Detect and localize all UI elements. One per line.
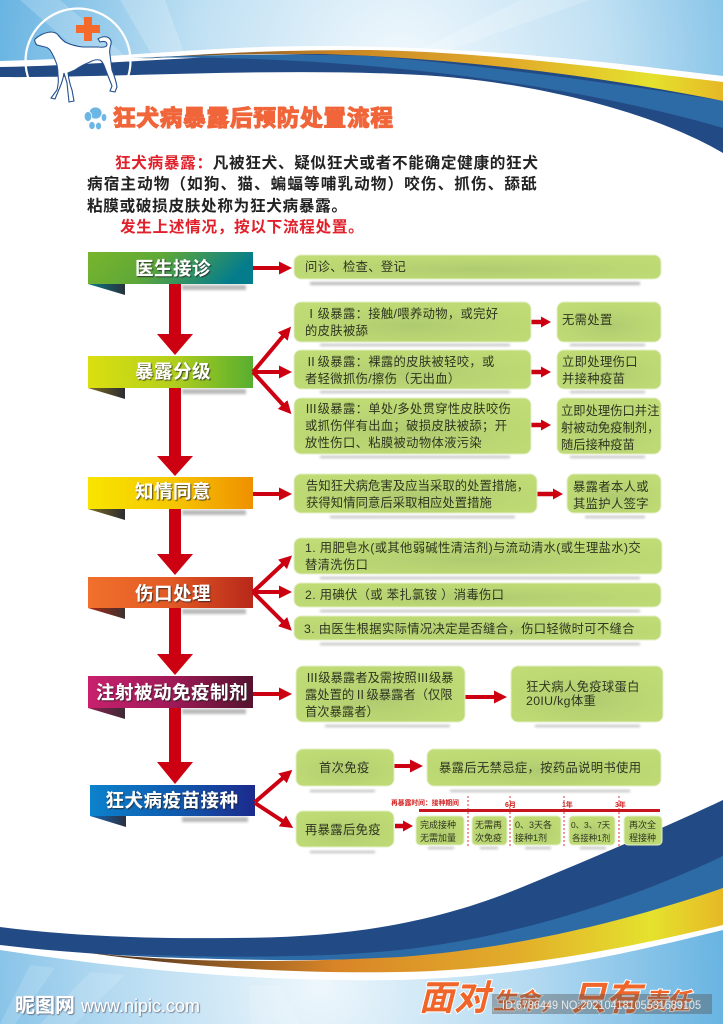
logo: dog in circle with cross: [26, 8, 130, 114]
exposure level I: 的皮肤被舔: [305, 323, 369, 338]
wound step 1: [294, 538, 662, 579]
schedule boxes: 0、3天各: [515, 819, 552, 830]
icon: paw: [84, 107, 107, 130]
passive immunity dose box: 狂犬病人免疫球蛋白: [526, 679, 640, 694]
re-exposure timeline: 再暴露时间：接种期间: [391, 798, 459, 807]
wound step 1: 替清洗伤口: [305, 558, 368, 572]
icon: medical cross: [76, 17, 100, 41]
background: bottom swoosh: [0, 800, 723, 972]
passive immunity target box: [296, 666, 465, 727]
passive immunity target box: 首次暴露者）: [305, 705, 379, 719]
background: top swoosh: [0, 46, 723, 160]
exposure level II: 者轻微抓伤/擦伤（无出血）: [305, 372, 461, 386]
re-exposure timeline: 1年: [562, 800, 573, 809]
background: top sky: [0, 0, 723, 110]
level III action: [557, 398, 661, 458]
level II action: 并接种疫苗: [562, 371, 625, 386]
vertical flow arrows: [157, 284, 193, 784]
icon: dog: [35, 32, 117, 102]
watermark: id strip: ID:6786449 NO:20210418105531689105: [502, 998, 701, 1012]
intro text: 发生上述情况，按以下流程处置。: [120, 217, 364, 236]
first immunization note: 暴露后无禁忌症，按药品说明书使用: [439, 760, 641, 775]
level III action: 立即处理伤口并注: [561, 403, 659, 418]
schedule boxes: [416, 816, 662, 849]
banner: 医生接诊: [88, 252, 253, 295]
passive immunity dose box: [511, 666, 663, 727]
exposure level III: Ⅲ级暴露：单处/多处贯穿性皮肤咬伤: [305, 401, 511, 416]
background: bottom sky: [0, 930, 723, 1024]
slogan: 生命，: [493, 988, 562, 1014]
schedule boxes: 接种1剂: [515, 832, 547, 843]
first immunization note: [427, 749, 661, 792]
banner: 暴露分级: 暴露分级: [135, 361, 211, 382]
level I action: 无需处置: [562, 313, 613, 327]
re-exposure timeline: 3年: [615, 800, 626, 809]
re-exposure box: [296, 811, 394, 853]
banner: 狂犬病疫苗接种: [90, 785, 255, 827]
banner: 伤口处理: [88, 577, 253, 619]
banner: 知情同意: [88, 477, 253, 520]
exposure level I: Ⅰ级暴露：接触/喂养动物，或完好: [305, 306, 498, 321]
schedule boxes: 完成接种: [420, 819, 456, 830]
schedule boxes: 次免疫: [475, 832, 502, 843]
wound step 3: 3. 由医生根据实际情况决定是否缝合，伤口轻微时可不缝合: [304, 621, 635, 636]
banner: 注射被动免疫制剂: 注射被动免疫制剂: [96, 682, 248, 703]
consent signature box: [567, 474, 661, 518]
passive immunity target box: Ⅲ级暴露者及需按照Ⅲ级暴: [306, 671, 454, 685]
intro text: 狂犬病暴露：凡被狂犬、疑似狂犬或者不能确定健康的狂犬: [115, 153, 539, 172]
first immunization box: 首次免疫: [319, 760, 370, 775]
slogan: [419, 979, 693, 1018]
connector arrows: [253, 268, 555, 826]
level II action: 立即处理伤口: [562, 354, 638, 369]
consent box: 告知狂犬病危害及应当采取的处置措施，: [306, 478, 529, 493]
consent signature box: 其监护人签字: [573, 496, 649, 511]
schedule boxes: 各接种1剂: [572, 833, 610, 843]
level III action: 随后接种疫苗: [561, 437, 635, 452]
first immunization box: [296, 749, 394, 792]
watermark: site: [15, 995, 200, 1017]
watermark: site: 昵图网: [15, 995, 75, 1017]
level II action: [557, 350, 661, 393]
banner: 伤口处理: 伤口处理: [135, 583, 211, 604]
consent box: [294, 474, 537, 518]
watermark: id strip: [492, 994, 712, 1014]
banner: 暴露分级: [88, 356, 253, 399]
schedule boxes: 无需加量: [420, 833, 456, 843]
exposure level II: Ⅱ级暴露：裸露的皮肤被轻咬，或: [305, 354, 495, 369]
intro text: [87, 153, 539, 236]
slogan: 面对: [419, 979, 494, 1018]
watermark: site: www.nipic.com: [80, 996, 200, 1016]
passive immunity target box: 露处置的Ⅱ级暴露者（仅限: [305, 687, 453, 702]
schedule boxes: 无需再: [475, 820, 502, 830]
exposure level III: [294, 398, 531, 458]
exposure level III: 或抓伤伴有出血；破损皮肤被舔；开: [305, 418, 507, 433]
consent signature box: 暴露者本人或: [573, 480, 649, 494]
wound step 2: 2. 用碘伏（或 苯扎氯铵 ）消毒伤口: [305, 588, 504, 602]
step 1 box: 问诊: [294, 255, 661, 285]
wound step 1: 1. 用肥皂水(或其他弱碱性清洁剂)与流动清水(或生理盐水)交: [305, 540, 641, 555]
wound step 2: [294, 583, 661, 612]
banner: 医生接诊: 医生接诊: [135, 258, 211, 279]
schedule boxes: 0、3、7天: [571, 820, 611, 830]
step 1 box: 问诊: 问诊、检查、登记: [305, 259, 406, 274]
level III action: 射被动免疫制剂，: [561, 420, 659, 435]
banner: 知情同意: 知情同意: [135, 481, 211, 502]
title: 狂犬病暴露后预防处置流程: [113, 106, 394, 131]
exposure level II: [294, 350, 531, 393]
banner: 注射被动免疫制剂: [88, 676, 253, 719]
intro text: 病宿主动物（如狗、猫、蝙蝠等哺乳动物）咬伤、抓伤、舔舐: [87, 174, 538, 193]
passive immunity dose box: 20IU/kg体重: [526, 694, 596, 708]
slogan: 责任: [644, 988, 693, 1014]
re-exposure box: 再暴露后免疫: [305, 822, 381, 837]
exposure level I: [294, 302, 531, 346]
schedule boxes: 程接种: [629, 832, 656, 843]
schedule boxes: 再次全: [629, 819, 656, 830]
banner: 狂犬病疫苗接种: 狂犬病疫苗接种: [105, 790, 239, 811]
slogan: 只有: [571, 979, 646, 1018]
wound step 3: [294, 616, 661, 645]
consent box: 获得知情同意后采取相应处置措施: [306, 495, 492, 510]
re-exposure timeline: [391, 796, 660, 847]
level I action: [557, 302, 661, 346]
intro text: 粘膜或破损皮肤处称为狂犬病暴露。: [87, 196, 348, 215]
exposure level III: 放性伤口、粘膜被动物体液污染: [305, 435, 482, 450]
re-exposure timeline: 6月: [505, 801, 516, 809]
